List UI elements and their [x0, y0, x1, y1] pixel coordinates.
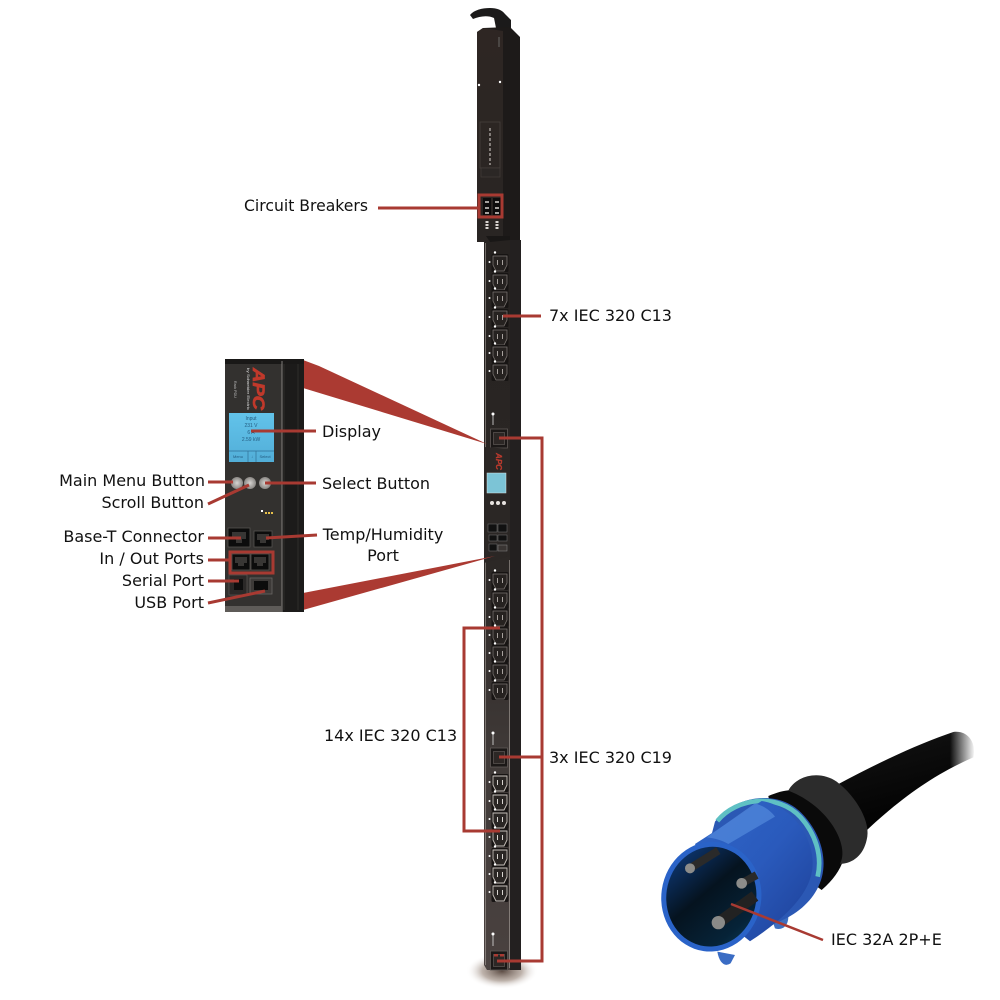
outlets: C13 lower group	[488, 771, 508, 902]
neck	[768, 790, 844, 890]
callout: circuit breakers: Circuit Breakers	[244, 196, 368, 215]
outlets: C13 middle group	[488, 569, 508, 700]
USB port	[250, 578, 272, 594]
cable	[837, 732, 974, 837]
tab: bottom	[717, 952, 735, 965]
display: 6 A	[247, 430, 255, 436]
display: Select	[259, 454, 271, 459]
temp/humidity port	[254, 531, 272, 547]
callout: 3x C19: 3x IEC 320 C19	[549, 748, 672, 767]
callout: Base-T connector: Base-T Connector	[63, 527, 204, 546]
display: Input	[245, 416, 257, 422]
tab: right	[773, 917, 788, 929]
callout: display: Display	[322, 422, 381, 441]
callout: main menu button: Main Menu Button	[59, 471, 205, 490]
body highlight	[707, 803, 775, 844]
magnifier wedge: lower	[303, 556, 495, 610]
display: 231 V	[244, 423, 258, 429]
pins	[685, 851, 757, 929]
control module on strip	[484, 447, 510, 563]
plug: IEC 32A	[654, 730, 980, 965]
callout: display	[251, 422, 381, 441]
outlet: C19 top	[490, 412, 508, 448]
callout: scroll button	[101, 485, 249, 512]
power cord	[470, 8, 511, 28]
display: 2.59 kW	[242, 437, 260, 443]
callout: temp/humidity port: Port	[367, 546, 399, 565]
callout: serial port: Serial Port	[122, 571, 204, 590]
model label: Rack PDU	[233, 381, 237, 398]
callout: temp/humidity port: Temp/Humidity	[322, 525, 443, 544]
in port	[232, 554, 250, 570]
callout: temp/humidity port	[266, 525, 443, 565]
collar	[788, 775, 868, 864]
rim	[654, 835, 768, 958]
outlets: 7x C13 top group	[488, 251, 508, 381]
callout: select button: Select Button	[322, 474, 430, 493]
display: ↓	[251, 454, 253, 459]
callout: IEC 32A 2P+E	[731, 904, 942, 949]
LED indicators	[261, 510, 273, 514]
socket inner	[660, 841, 763, 952]
callout: in/out ports: In / Out Ports	[99, 549, 204, 568]
logo tagline: by Schneider Electric	[246, 368, 250, 410]
display	[229, 413, 274, 462]
body	[695, 801, 813, 941]
buttons	[231, 477, 271, 489]
callout: scroll button: Scroll Button	[101, 493, 204, 512]
callout: IEC 32A 2P+E: IEC 32A 2P+E	[831, 930, 942, 949]
outlet: C19 middle	[490, 732, 508, 767]
callout: 3x C19	[497, 438, 672, 961]
Base-T connector	[228, 528, 250, 547]
callout: 14x C13: 14x IEC 320 C13	[324, 726, 457, 745]
ring highlight	[717, 801, 819, 877]
callout: USB port: USB Port	[134, 593, 204, 612]
callout: 14x C13	[324, 628, 500, 831]
out port	[251, 554, 269, 570]
APC logo: APC	[249, 367, 268, 411]
control module on strip: APC	[494, 452, 503, 470]
panel: main PDU strip	[466, 236, 538, 989]
display: Menu	[233, 454, 243, 459]
callout: USB port	[134, 591, 265, 612]
breakers	[483, 198, 501, 215]
serial port	[229, 575, 247, 595]
cable end fade	[950, 730, 980, 767]
panel: breaker housing	[477, 27, 520, 242]
callout: circuit breakers	[244, 195, 502, 217]
callout: 7x C13: 7x IEC 320 C13	[549, 306, 672, 325]
magnifier wedge: upper	[303, 360, 487, 444]
ring	[707, 798, 824, 933]
panel: control module inset	[225, 359, 304, 612]
outlet: C19 bottom	[490, 932, 508, 970]
callout: in/out ports	[99, 549, 273, 573]
